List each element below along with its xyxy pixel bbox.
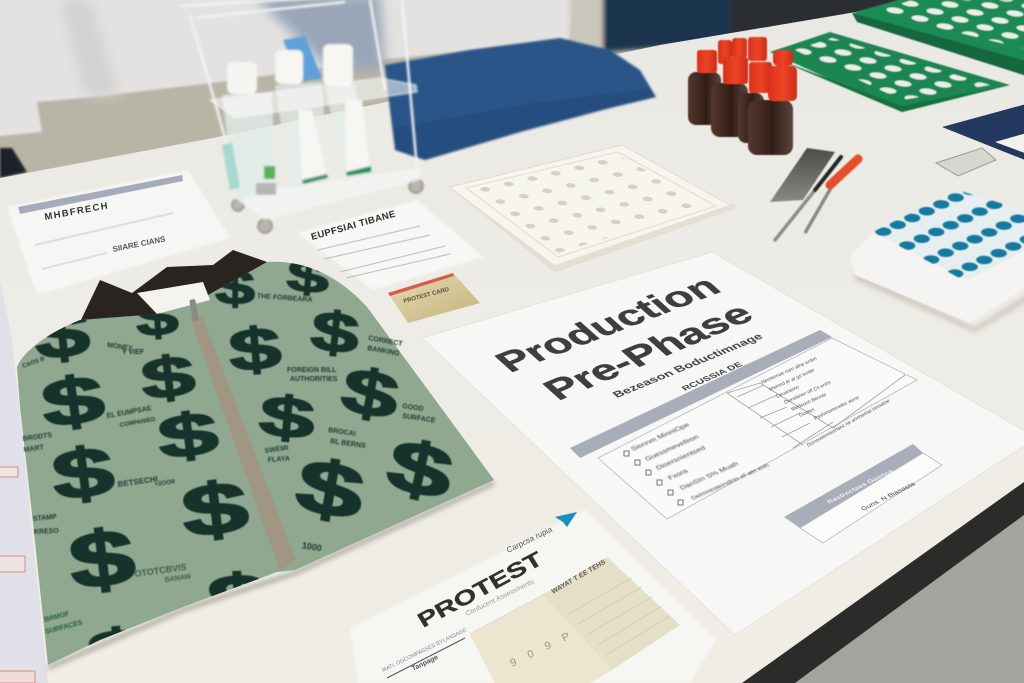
pen right (805, 186, 832, 233)
jacket micro text: BANKING (367, 345, 401, 358)
jacket body (17, 262, 494, 665)
dollar signs: $ (205, 559, 271, 640)
main paper: production pre-phase (422, 252, 1024, 635)
stamp digits: 9 0 9 P (508, 628, 576, 670)
jacket micro text: BRMOF (44, 610, 71, 624)
wheels (232, 179, 423, 233)
jacket micro text: SURFACE (402, 413, 436, 425)
checklist items: DanSIn S% Muah (678, 460, 740, 491)
checklist items: Delmnesteindinn ef atn enh (690, 462, 771, 501)
jacket micro text (22, 293, 436, 636)
checklist marks (624, 451, 683, 505)
grey header bar (570, 330, 832, 458)
jacket micro text: BETSECHI (117, 474, 158, 489)
dollar signs: $ (226, 314, 284, 384)
dollar signs: $ (154, 398, 222, 472)
table cell text: Mamnd er ar gs tunler (768, 367, 816, 393)
grey header bar (18, 175, 183, 214)
bottle middle (275, 50, 328, 185)
table cell text: Disnoutennieshanc ne annnemat innoatne (806, 398, 891, 449)
far left strip paper (0, 270, 48, 683)
jacket micro text: CAOS B (22, 356, 46, 370)
rack base (232, 168, 420, 220)
paper: second notice (297, 200, 483, 290)
dollar signs: $ (137, 342, 199, 412)
table cell text (760, 356, 891, 449)
paper: protest (350, 510, 716, 683)
white hole tray (450, 145, 735, 272)
table cell text: Dwndanen ofl Cs enhs (783, 380, 832, 406)
table cell text: Nemiernoe men afne entim (760, 356, 818, 386)
dollar signs: $ (48, 431, 118, 515)
gold card: PROTEST CARD (403, 287, 451, 305)
bottle B (711, 57, 748, 137)
dollar signs: $ (308, 299, 362, 366)
jacket micro text: STAMP (32, 513, 57, 523)
jacket micro text: 1000 (301, 540, 323, 553)
second notice title: EUPFSIAI TIBANE (310, 208, 397, 242)
jacket shadow (48, 483, 494, 668)
divider line (470, 566, 597, 634)
left cream panel (470, 595, 612, 683)
jacket micro text: BRODTS (22, 432, 53, 443)
protest title: PROTEST (414, 547, 548, 632)
bottle A (688, 50, 721, 125)
bottle C (738, 62, 772, 143)
protest form caption: MATL OGCOMPASSES BYLANSAGE (381, 627, 468, 674)
checklist items: Fxora (666, 467, 691, 481)
table cell text: Ouotes (798, 407, 816, 419)
dollar signs: $ (64, 513, 140, 607)
grey bar lower box (784, 444, 923, 528)
acrylic rack with three bottles (180, 0, 423, 233)
protest form line (387, 638, 465, 678)
collar (80, 250, 267, 322)
dollar signs: $ (257, 383, 317, 452)
lower box (800, 453, 942, 543)
table cell text: Wedsons Bennte (790, 392, 828, 413)
small grey card (936, 148, 996, 176)
rack frame (180, 0, 418, 190)
floor and table edge (742, 482, 1024, 683)
dollar signs: $ (177, 465, 253, 553)
dollar signs: $ (336, 353, 404, 433)
metal blade and pens (770, 148, 858, 240)
jacket micro text: MONEY (107, 342, 133, 353)
back caps (718, 37, 793, 66)
dollar signs: $ (285, 250, 331, 304)
bottles with red caps (688, 37, 797, 155)
zipper (189, 299, 296, 571)
jacket micro text: SWEMI (264, 445, 289, 455)
table cell text: Deuanemo (775, 384, 800, 400)
bottle left (222, 62, 276, 200)
checklist items: Sionnm MinniOpe (629, 421, 691, 452)
protest form word: Tanpage (411, 654, 439, 673)
pen left (775, 157, 841, 240)
jacket micro text: BANAW (164, 573, 192, 584)
dollar signs: $ (134, 287, 180, 347)
jacket micro text: +2OOR (154, 479, 176, 488)
jacket micro text: FLAYA (268, 455, 290, 464)
navy paper (942, 103, 1024, 162)
jacket micro text: EL EUMPSAE (106, 405, 152, 420)
jacket micro text: THE FORBEARA (257, 293, 313, 304)
table box (598, 338, 917, 519)
bottle right (323, 44, 372, 178)
jacket micro text: COMPANIED (119, 417, 157, 429)
main title: Production (487, 270, 729, 378)
green tray right (852, 0, 1024, 77)
notice title: MHBFRECH (44, 199, 109, 222)
dollar signs: $ (37, 361, 109, 442)
lower box: Guns. N Biasasta (860, 481, 917, 512)
jacket micro text: GOOD (402, 403, 424, 413)
jacket micro text: Y VIEF (122, 349, 145, 356)
protest brand: Carpcsa rupia (505, 525, 554, 555)
paper: left notice (7, 170, 230, 295)
blue folded cloth (385, 38, 656, 160)
jacket micro text: FOREIGN BILL (287, 367, 337, 374)
jacket micro text: KRESO (34, 528, 60, 536)
second notice lines (318, 226, 450, 278)
jacket micro text: OTOTCBVIS (134, 562, 187, 579)
right cream panel (543, 557, 680, 670)
protest logo arrow (555, 512, 577, 527)
dollar signs: $ (290, 442, 370, 537)
jacket micro text: BROCAI (328, 427, 356, 438)
green tray center (770, 32, 1010, 112)
jacket micro text: SURFACES (45, 619, 84, 636)
small caption: RCUSSIA DE_ (680, 358, 751, 392)
checklist items: Guessmevefeon (643, 433, 701, 462)
checklist items: Dioersnientsed (654, 444, 707, 471)
table grid (727, 375, 905, 448)
bottle D (748, 66, 797, 155)
lower box: Rastrectaes Gasnca (826, 468, 895, 505)
background: curtain and wall (0, 0, 1024, 200)
jacket with dollar print (17, 250, 494, 683)
main title (487, 270, 762, 406)
rack shelf (210, 78, 417, 118)
checklist items (629, 421, 771, 501)
jacket micro text: CORRECT (368, 335, 404, 348)
dollar signs: $ (380, 424, 460, 516)
dollar signs: $ (31, 295, 93, 374)
blue bottle behind (283, 36, 322, 82)
gold card (388, 273, 480, 323)
foam block with blue pills (850, 190, 1024, 333)
main title: Pre-Phase (535, 297, 762, 406)
name tag (137, 282, 210, 314)
jacket micro text: MART (23, 444, 45, 454)
dollar signs: $ (215, 261, 255, 314)
right cream panel: WAYAT T EE TEHS (551, 559, 607, 596)
subtitle: Bezeason Boductimnage (610, 331, 766, 400)
table cell text: Pashmorteneles wene (813, 395, 861, 422)
dollar signs (34, 263, 453, 646)
notice sub text: SIIARE CIANS (112, 234, 166, 254)
jacket micro text: AUTHORITIES (290, 376, 338, 383)
notice faint lines (35, 213, 173, 269)
protest subtitle: Confucent Assessments (465, 578, 536, 618)
jacket micro text: BL BERNS (330, 438, 366, 450)
blade (770, 148, 835, 202)
